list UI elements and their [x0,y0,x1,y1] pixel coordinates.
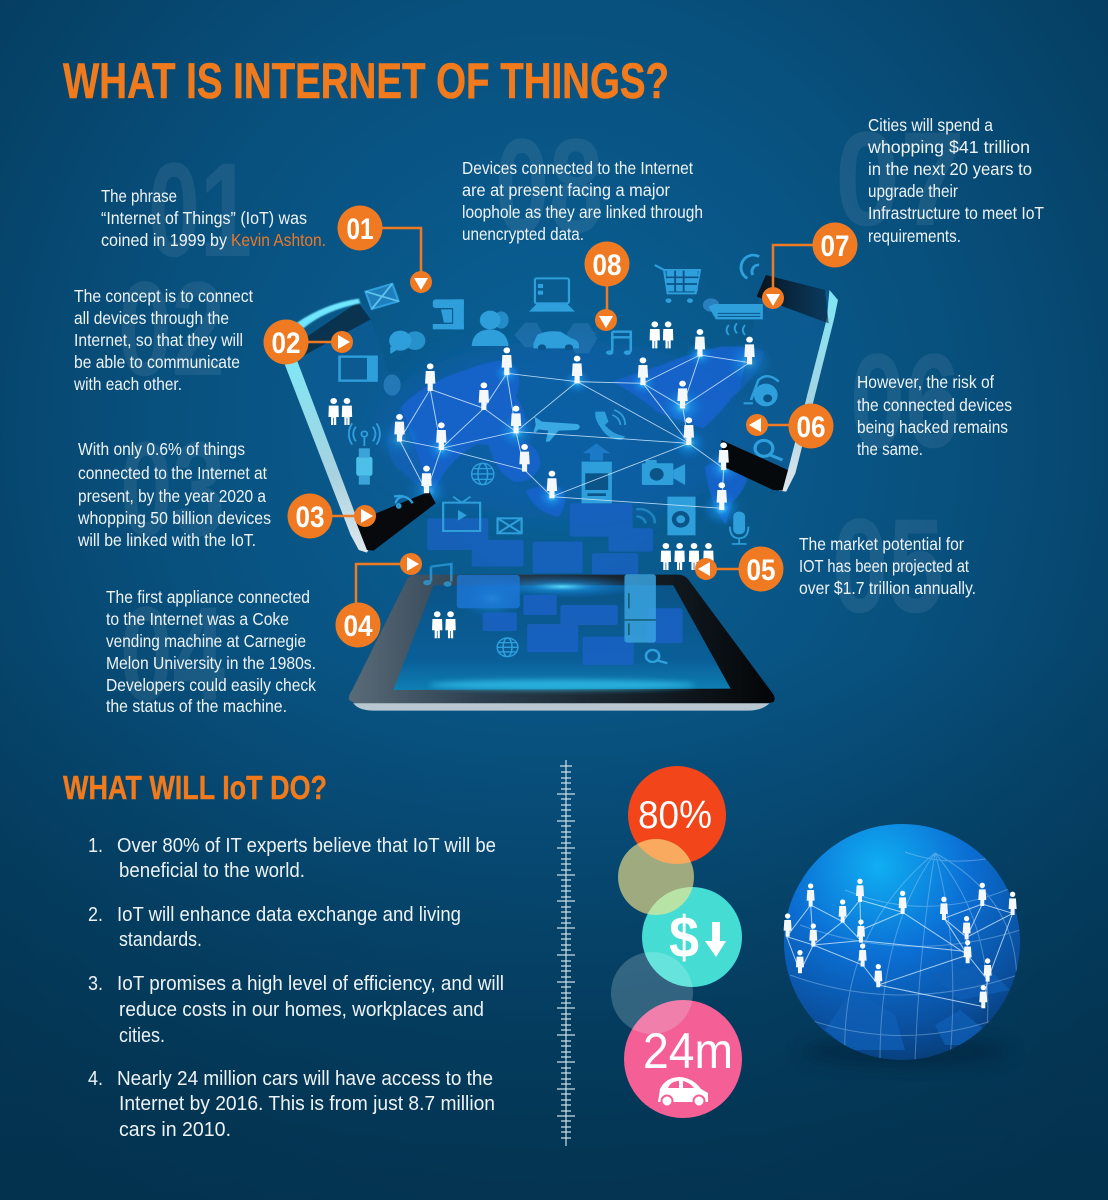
list of IoT benefits: IoT will enhance data exchange and living [117,903,461,926]
network lines [400,355,750,508]
text: fact 02: all devices through the [74,308,229,328]
text: fact 06: the same. [857,439,923,459]
list of IoT benefits: reduce costs in our homes, workplaces and [119,998,484,1021]
text: fact 03 [77,439,271,550]
globe continents [825,965,1010,1050]
text: fact 08: unencrypted data. [462,224,584,244]
text: fact 04: Developers could easily check [106,675,316,695]
callout 04 [336,553,422,648]
text: fact 07: requirements. [868,226,961,246]
text: fact 06 [857,372,1012,459]
icon: television [443,497,480,531]
list of IoT benefits: Over 80% of IT experts believe that IoT will be [117,834,496,857]
vertical ruler divider [557,760,575,1146]
heading: what will IoT do: WHAT WILL IoT DO? [63,769,327,806]
icon: vacuum cleaner [744,376,779,406]
icon: music note near tablet [423,564,452,587]
right phone [721,275,838,492]
icon: stand mixer [433,299,464,329]
ghost numerals: 07 [835,105,965,254]
ghost numerals [118,105,965,729]
floating blue panels [427,503,653,577]
text: fact 04: to the Internet was a Coke [106,609,289,629]
text: fact 01: The phrase [101,186,177,206]
icon: microwave [340,357,401,396]
callout 03 [288,494,376,538]
text: fact 06: However, the risk of [857,372,994,392]
icon: wifi middle [636,509,655,523]
text: fact 02: be able to communicate [74,352,240,372]
text: fact 02: with each other. [73,374,182,394]
text: fact 07 [867,115,1044,246]
icon: globe [472,463,494,485]
callout 05: 05 [746,554,776,587]
bubble: lower costs [642,887,742,987]
callout 07 [762,222,858,309]
bubble: 24 million cars [624,1000,742,1118]
icon: telephone [595,410,625,440]
globe network [784,879,1017,1008]
icon: microphone [730,512,748,544]
ghost numerals: 05 [832,492,944,641]
tablet [349,564,775,711]
text: fact 05: IOT has been projected at [799,556,969,576]
stat bubbles [611,766,742,1118]
list of IoT benefits: Nearly 24 million cars will have access to the [117,1067,493,1090]
network people [394,329,755,510]
glow behind network [377,341,774,527]
bubble: 80 percent: 80% [638,794,712,837]
text: fact 05 [799,534,976,598]
text: fact 04: vending machine at Carnegie [106,631,306,651]
callout 06: 06 [796,411,826,444]
icon: wifi tower [349,423,380,446]
bubble: teal connector [611,952,693,1034]
text: fact 08: loophole as they are linked through [462,202,703,222]
ghost numerals: 08 [495,112,603,261]
text: fact 08: are at present facing a major [462,180,670,200]
ghost numerals: 03 [120,415,225,564]
callout 02 [264,320,353,364]
icon: globe on tablet [497,638,518,657]
bubble: lower costs: $ [669,905,699,970]
world map [388,346,764,525]
icon: car with hexagons [514,323,597,353]
hero illustration: devices and connected world [284,255,838,711]
text: fact 04 [106,587,316,716]
list of IoT benefits: IoT promises a high level of efficiency, and will [117,972,504,995]
left phone [284,299,436,553]
globe with connected people [784,824,1020,1068]
text: fact 07: Cities will spend a [868,115,993,135]
icon: user group [472,311,509,346]
globe grid [790,852,1020,1060]
bubble: 24 million cars: 24m [643,1023,733,1079]
text: fact 04: Melon University in the 1980s. [106,653,316,673]
text: fact 07: upgrade their [868,181,958,201]
text: fact 04: The first appliance connected [106,587,310,607]
list of IoT benefits: 1. [88,834,103,857]
callout 06 [746,404,834,448]
text: fact 08: Devices connected to the Internet [462,158,693,178]
icon: video camera [642,460,685,485]
text: fact 03: With only 0.6% of things [78,439,245,459]
text: fact 07: whopping $41 trillion [867,137,1030,157]
device icons [328,255,782,570]
list of IoT benefits: cities. [119,1024,165,1047]
text: fact 01: coined in 1999 by [101,230,227,250]
list of IoT benefits: cars in 2010. [119,1118,231,1141]
callout 07: 07 [820,230,850,263]
text: fact 03: connected to the Internet at [78,463,267,483]
icon: air conditioner [703,298,763,335]
callout 04: 04 [344,610,373,643]
callout 01 [338,206,432,293]
text: fact 03: whopping 50 billion devices [77,508,271,528]
icon: people pair on tablet [432,611,456,638]
icon: group of four people [661,543,714,570]
icon: laptop [529,278,575,312]
icon: people pair left [328,398,352,425]
map haze [374,340,758,520]
list of IoT benefits: 2. [88,903,103,926]
text: fact 05: over $1.7 trillion annually. [799,578,976,598]
icon: fridge [624,574,656,643]
icon: airplane [533,417,580,442]
list of IoT benefits [88,834,504,1141]
icon: music note [606,332,631,355]
icon: envelope lower [498,518,522,533]
icon: wifi top right [741,255,759,278]
icon: oven [582,443,612,503]
icon: smart watch [356,448,372,485]
text: fact 02: Internet, so that they will [74,330,243,350]
icon: speech bubbles [389,331,425,354]
callout 05 [695,546,784,592]
icon: magnifier on tablet [646,650,667,663]
text: fact 03: will be linked with the IoT. [77,530,256,550]
text: fact 06: being hacked remains [857,417,1008,437]
ghost numerals: 01 [148,136,252,285]
bubble: olive connector [618,839,694,915]
icon: envelope [366,284,399,309]
list of IoT benefits: 3. [88,972,103,995]
icon: car [658,1077,708,1106]
list of IoT benefits: beneficial to the world. [119,859,305,882]
list of IoT benefits: 4. [88,1067,103,1090]
list of IoT benefits: Internet by 2016. This is from just 8.7 million [119,1092,495,1115]
text: fact 05: The market potential for [799,534,964,554]
text: fact 02: The concept is to connect [74,286,253,306]
text: fact 01 [101,186,326,250]
text: fact 06: the connected devices [857,395,1012,415]
callout 01: 01 [346,213,374,246]
text: fact 08 [462,158,703,244]
callout 02: 02 [272,327,300,360]
text: fact 07: Infrastructure to meet IoT [868,203,1044,223]
icon: shopping cart [655,265,700,303]
icon: wifi left bottom [394,496,412,508]
tablet panels [457,575,683,665]
callout 08 [584,242,630,331]
bubble: 80 percent [628,766,726,864]
icon: washing machine [667,497,696,535]
ghost numerals: 02 [118,255,225,404]
text: fact 01: “Internet of Things” (IoT) was [101,208,307,228]
ghost numerals: 04 [120,580,225,729]
list of IoT benefits: standards. [119,928,202,951]
text: fact 03: present, by the year 2020 a [78,486,266,506]
text: fact 01: Kevin Ashton. [231,230,326,250]
icon: magnifier [755,440,782,460]
callout 03: 03 [296,501,324,534]
callout 08: 08 [592,249,622,282]
text: fact 07: in the next 20 years to [868,159,1032,179]
text: fact 02 [73,286,253,394]
ghost numerals: 06 [850,327,960,476]
title: WHAT IS INTERNET OF THINGS? [63,53,669,109]
icon: people pair top [650,321,673,348]
text: fact 04: the status of the machine. [106,696,287,716]
